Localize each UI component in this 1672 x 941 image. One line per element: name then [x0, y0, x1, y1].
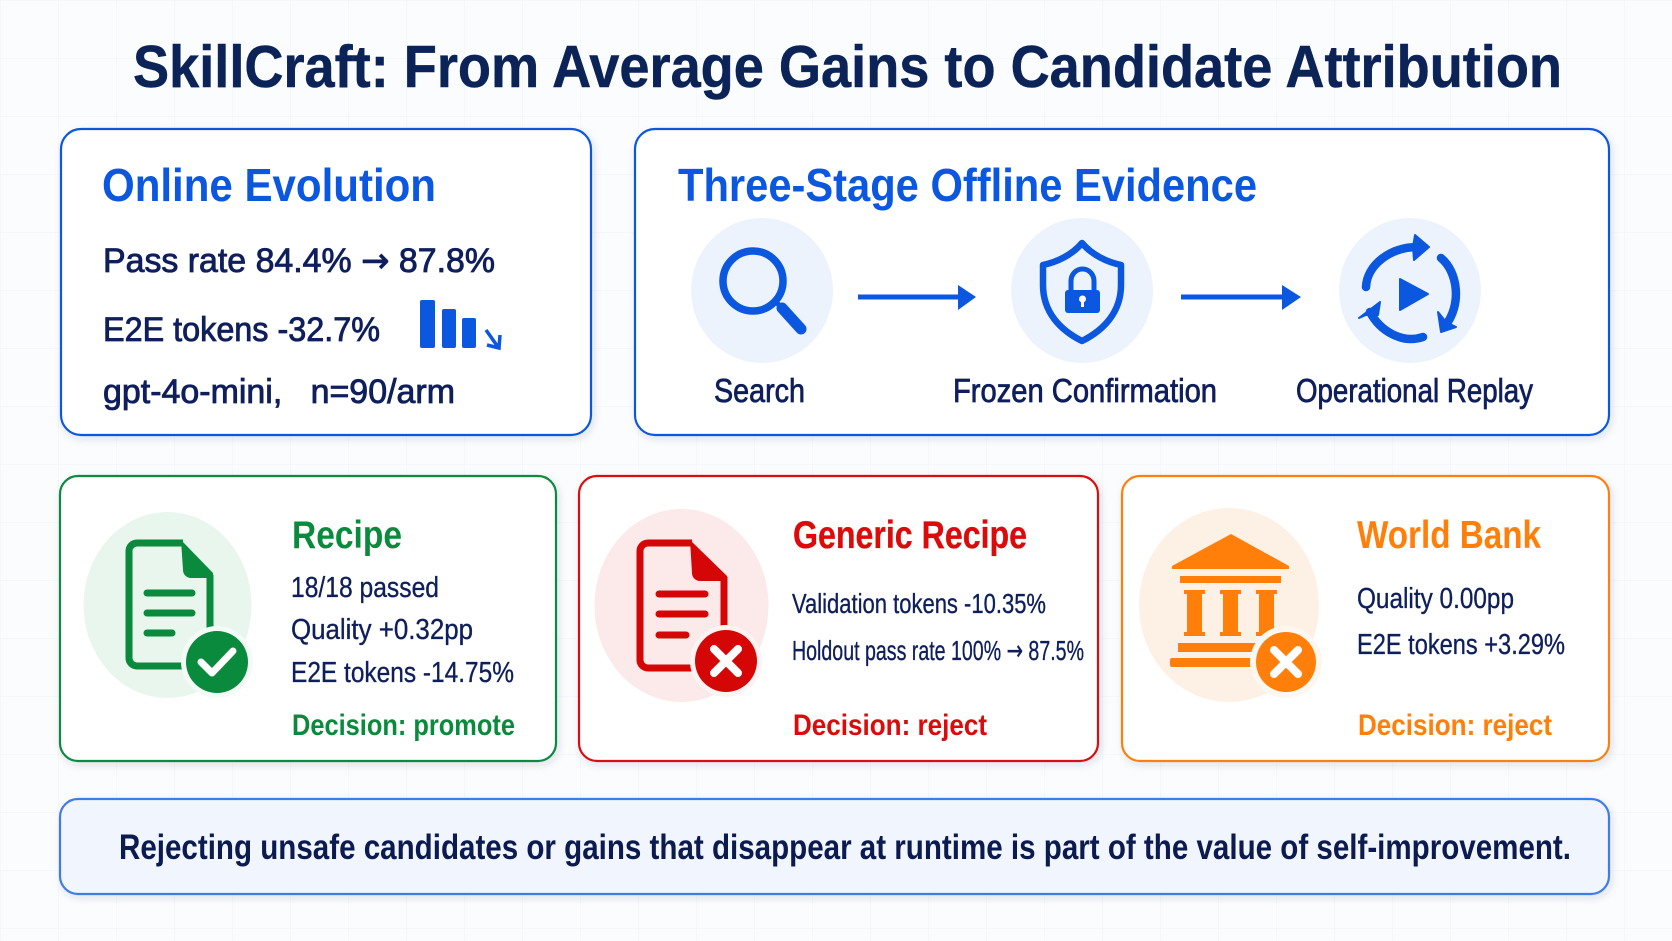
- text: e2e tokens: E2E tokens +3.29%: [1357, 629, 1565, 661]
- label: search: Search: [714, 372, 805, 409]
- text: validation tokens: Validation tokens -10.35%: [792, 588, 1046, 619]
- arrow: search to frozen confirmation: [858, 285, 976, 310]
- icon: document with check: [84, 512, 253, 698]
- decision: reject: Decision: reject: [793, 709, 987, 742]
- label: operational replay: Operational Replay: [1296, 372, 1533, 409]
- heading: world bank: World Bank: [1357, 514, 1541, 557]
- text: pass rate: Pass rate 84.4% → 87.8%: [103, 241, 495, 281]
- text: e2e tokens: E2E tokens -32.7%: [103, 311, 380, 349]
- icon: falling bars: [420, 300, 500, 348]
- decision: promote: Decision: promote: [292, 709, 515, 742]
- panel: recipe: [60, 476, 556, 761]
- icon: replay: [1339, 218, 1481, 363]
- text: quality: Quality +0.32pp: [291, 614, 473, 646]
- panel: online evolution: [61, 129, 591, 435]
- heading: online evolution: Online Evolution: [102, 159, 436, 211]
- text: e2e tokens: E2E tokens -14.75%: [291, 657, 514, 689]
- title: SkillCraft: From Average Gains to Candidate Attribution: [133, 34, 1562, 100]
- heading: three-stage offline evidence: Three-Stage Offline Evidence: [678, 159, 1257, 211]
- heading: generic recipe: Generic Recipe: [793, 514, 1027, 557]
- text: passed: 18/18 passed: [291, 572, 439, 604]
- panel: world bank: [1122, 476, 1609, 761]
- icon: shield lock: [1011, 218, 1153, 363]
- text: holdout pass rate: Holdout pass rate 100% → 87.5%: [792, 634, 1084, 667]
- icon: bank with cross: [1139, 508, 1322, 702]
- callout: takeaway banner: [60, 799, 1609, 894]
- icon: search: [691, 218, 833, 363]
- decision: reject: Decision: reject: [1358, 709, 1552, 742]
- text: quality: Quality 0.00pp: [1357, 583, 1514, 615]
- text: model and sample size: gpt-4o-mini, n=90/arm: [103, 373, 455, 411]
- arrow: frozen confirmation to operational replay: [1181, 285, 1301, 310]
- icon: document with cross: [594, 509, 768, 702]
- heading: recipe: Recipe: [292, 514, 402, 557]
- panel: generic recipe: [579, 476, 1098, 761]
- panel: three-stage offline evidence: [635, 129, 1609, 435]
- label: frozen confirmation: Frozen Confirmation: [953, 372, 1217, 409]
